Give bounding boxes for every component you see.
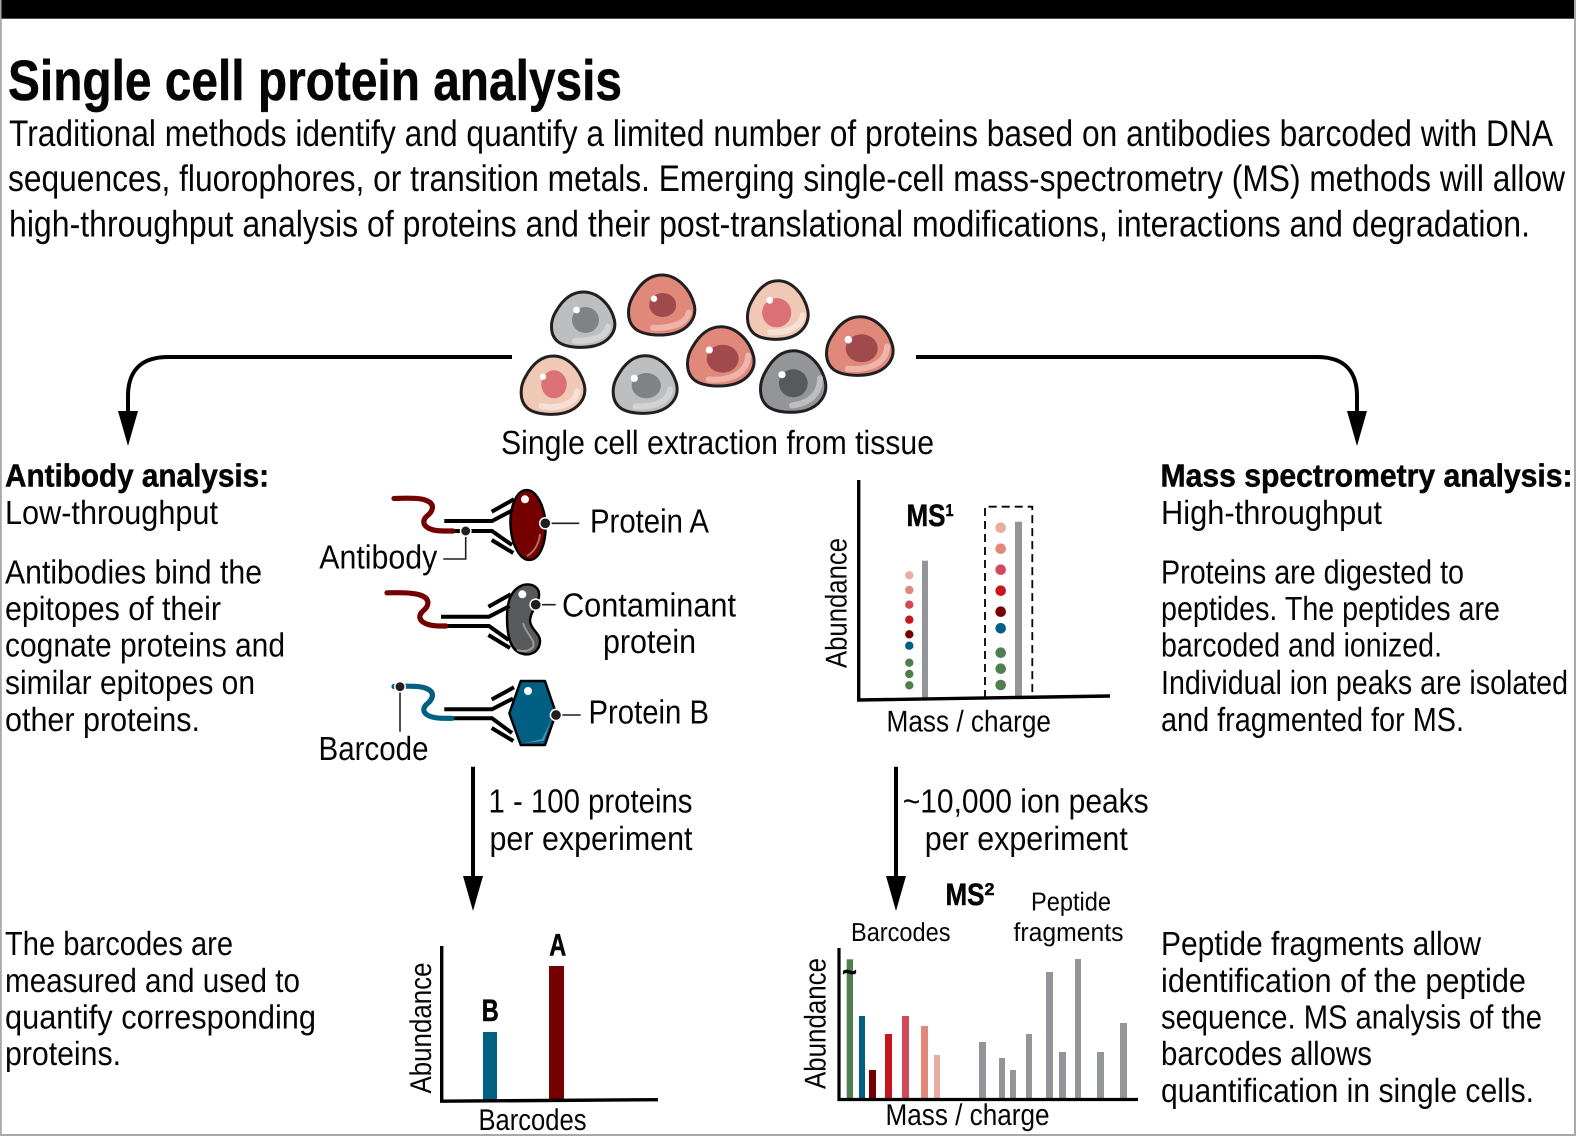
contaminant protein <box>507 584 540 654</box>
cell: gray 2 <box>613 356 677 413</box>
antibody leader <box>443 526 471 559</box>
peptide fragments label: fragments <box>1014 917 1124 947</box>
cell: peach 1 <box>747 281 808 339</box>
chart: MS2 spectrum <box>800 877 1138 1132</box>
antibody description: Antibodies bind the <box>5 554 262 591</box>
x axis label: Mass / charge <box>886 706 1051 739</box>
antibody with contaminant protein <box>387 584 737 661</box>
x axis label: Mass / charge <box>886 1099 1050 1132</box>
antibody A with protein A <box>319 489 710 576</box>
cell: salmon 1 <box>628 275 695 335</box>
y axis label: Abundance <box>820 538 854 668</box>
protein A <box>509 489 547 561</box>
antibody label: Antibody <box>319 539 438 576</box>
peptide fragment bars <box>979 959 1127 1099</box>
label: ion peaks per experiment <box>903 784 1149 858</box>
MS2 label: MS <box>946 877 984 912</box>
title: Single cell protein analysis <box>8 49 622 113</box>
axes <box>839 948 1138 1100</box>
label: ion peaks per experiment: per experiment <box>925 821 1128 858</box>
ion dots small peak <box>905 571 914 690</box>
blue barcode <box>394 686 452 718</box>
dashed isolation box <box>985 507 1032 698</box>
label: proteins per experiment: per experiment <box>490 821 693 858</box>
arrow: cells to antibody analysis <box>118 357 512 446</box>
panel: antibody analysis text <box>5 458 285 739</box>
subheading: high-throughput: High-throughput <box>1161 495 1383 532</box>
antibody description: similar epitopes on <box>5 665 255 702</box>
panel: mass spectrometry analysis text <box>1160 458 1572 739</box>
antibody description: cognate proteins and <box>5 628 285 665</box>
text: barcodes measured: measured and used to <box>5 963 300 1000</box>
antibody arms <box>444 499 514 553</box>
subheading: low-throughput: Low-throughput <box>5 495 219 532</box>
chart: MS1 spectrum <box>820 480 1110 739</box>
text: barcodes measured: quantify corresponding <box>5 1000 316 1036</box>
arrow: MS1 to MS2 <box>886 767 906 911</box>
barcode bars <box>847 959 940 1099</box>
chart: barcode abundance <box>405 928 658 1136</box>
protein B <box>509 681 556 745</box>
antibody description: epitopes of their <box>5 591 221 628</box>
arrow: cells to mass spectrometry analysis <box>916 357 1367 446</box>
heading: antibody analysis: Antibody analysis: <box>5 458 269 494</box>
ion dots large peak <box>995 522 1006 690</box>
intro paragraph <box>8 113 1565 244</box>
mass spectrometry description <box>1161 554 1568 739</box>
red barcode <box>387 593 446 626</box>
cell: peach 2 <box>521 356 585 414</box>
barcode leader <box>395 682 405 732</box>
y axis label: Abundance <box>800 958 832 1089</box>
antibody with protein B <box>318 681 709 768</box>
axes <box>859 480 1110 700</box>
contaminant label: Contaminant <box>562 588 737 625</box>
text: barcodes measured: proteins. <box>5 1036 121 1073</box>
label: proteins per experiment: 1 - 100 proteins <box>488 784 692 821</box>
protein A label: Protein A <box>590 504 710 541</box>
cell: salmon 2 <box>687 327 754 386</box>
text: peptide fragments: quantification in single cells. <box>1161 1073 1534 1110</box>
mass spectrometry description: Proteins are digested to <box>1161 554 1464 591</box>
y axis label: Abundance <box>405 962 438 1094</box>
MS1 label: 1 <box>946 501 954 520</box>
peptide fragments label: Peptide <box>1031 887 1111 917</box>
cell: dark gray <box>760 351 826 412</box>
axis break mark: ~ <box>842 959 857 986</box>
bar B <box>483 1032 497 1100</box>
text: peptide fragments: Peptide fragments allow <box>1161 926 1482 963</box>
contaminant label <box>562 588 737 661</box>
barcodes label: Barcodes <box>851 917 950 947</box>
label: proteins per experiment <box>488 784 693 858</box>
cell cluster <box>521 275 893 414</box>
MS2 label: 2 <box>984 880 994 899</box>
label: ion peaks per experiment: ~10,000 ion peaks <box>903 784 1149 821</box>
top black bar <box>2 0 1574 19</box>
cell: gray 1 <box>551 292 615 347</box>
bar A <box>549 966 564 1100</box>
label B: B <box>482 993 499 1028</box>
mass spectrometry description: barcoded and ionized. <box>1161 628 1442 665</box>
protein A leader <box>540 518 579 529</box>
text: peptide fragments: identification of the peptide <box>1161 963 1526 1000</box>
mass spectrometry description: and fragmented for MS. <box>1161 702 1464 739</box>
label A: A <box>549 928 566 963</box>
red barcode <box>394 498 453 531</box>
antibody arms <box>441 594 511 648</box>
contaminant label: protein <box>603 624 696 661</box>
antibody description: other proteins. <box>5 702 200 739</box>
axes <box>442 946 658 1101</box>
antibody diagram <box>318 489 737 768</box>
text: peptide fragments: barcodes allows <box>1161 1036 1372 1073</box>
MS1 label: MS <box>906 498 946 533</box>
barcode label: Barcode <box>318 731 428 768</box>
bars <box>922 522 1022 699</box>
antibody description <box>5 554 285 739</box>
arrow: antibody to barcodes chart <box>463 767 483 911</box>
text: peptide fragments <box>1161 926 1542 1110</box>
peptide fragments label <box>1014 887 1124 947</box>
text: barcodes measured <box>5 926 316 1073</box>
protein B leader <box>550 709 581 721</box>
text: barcodes measured: The barcodes are <box>5 926 233 963</box>
mass spectrometry description: peptides. The peptides are <box>1161 591 1500 628</box>
contaminant leader <box>530 599 556 610</box>
cell: salmon 3 <box>826 317 893 375</box>
caption: single cell extraction: Single cell extraction from tissue <box>501 425 934 462</box>
antibody arms <box>444 687 514 741</box>
protein B label: Protein B <box>588 694 709 731</box>
